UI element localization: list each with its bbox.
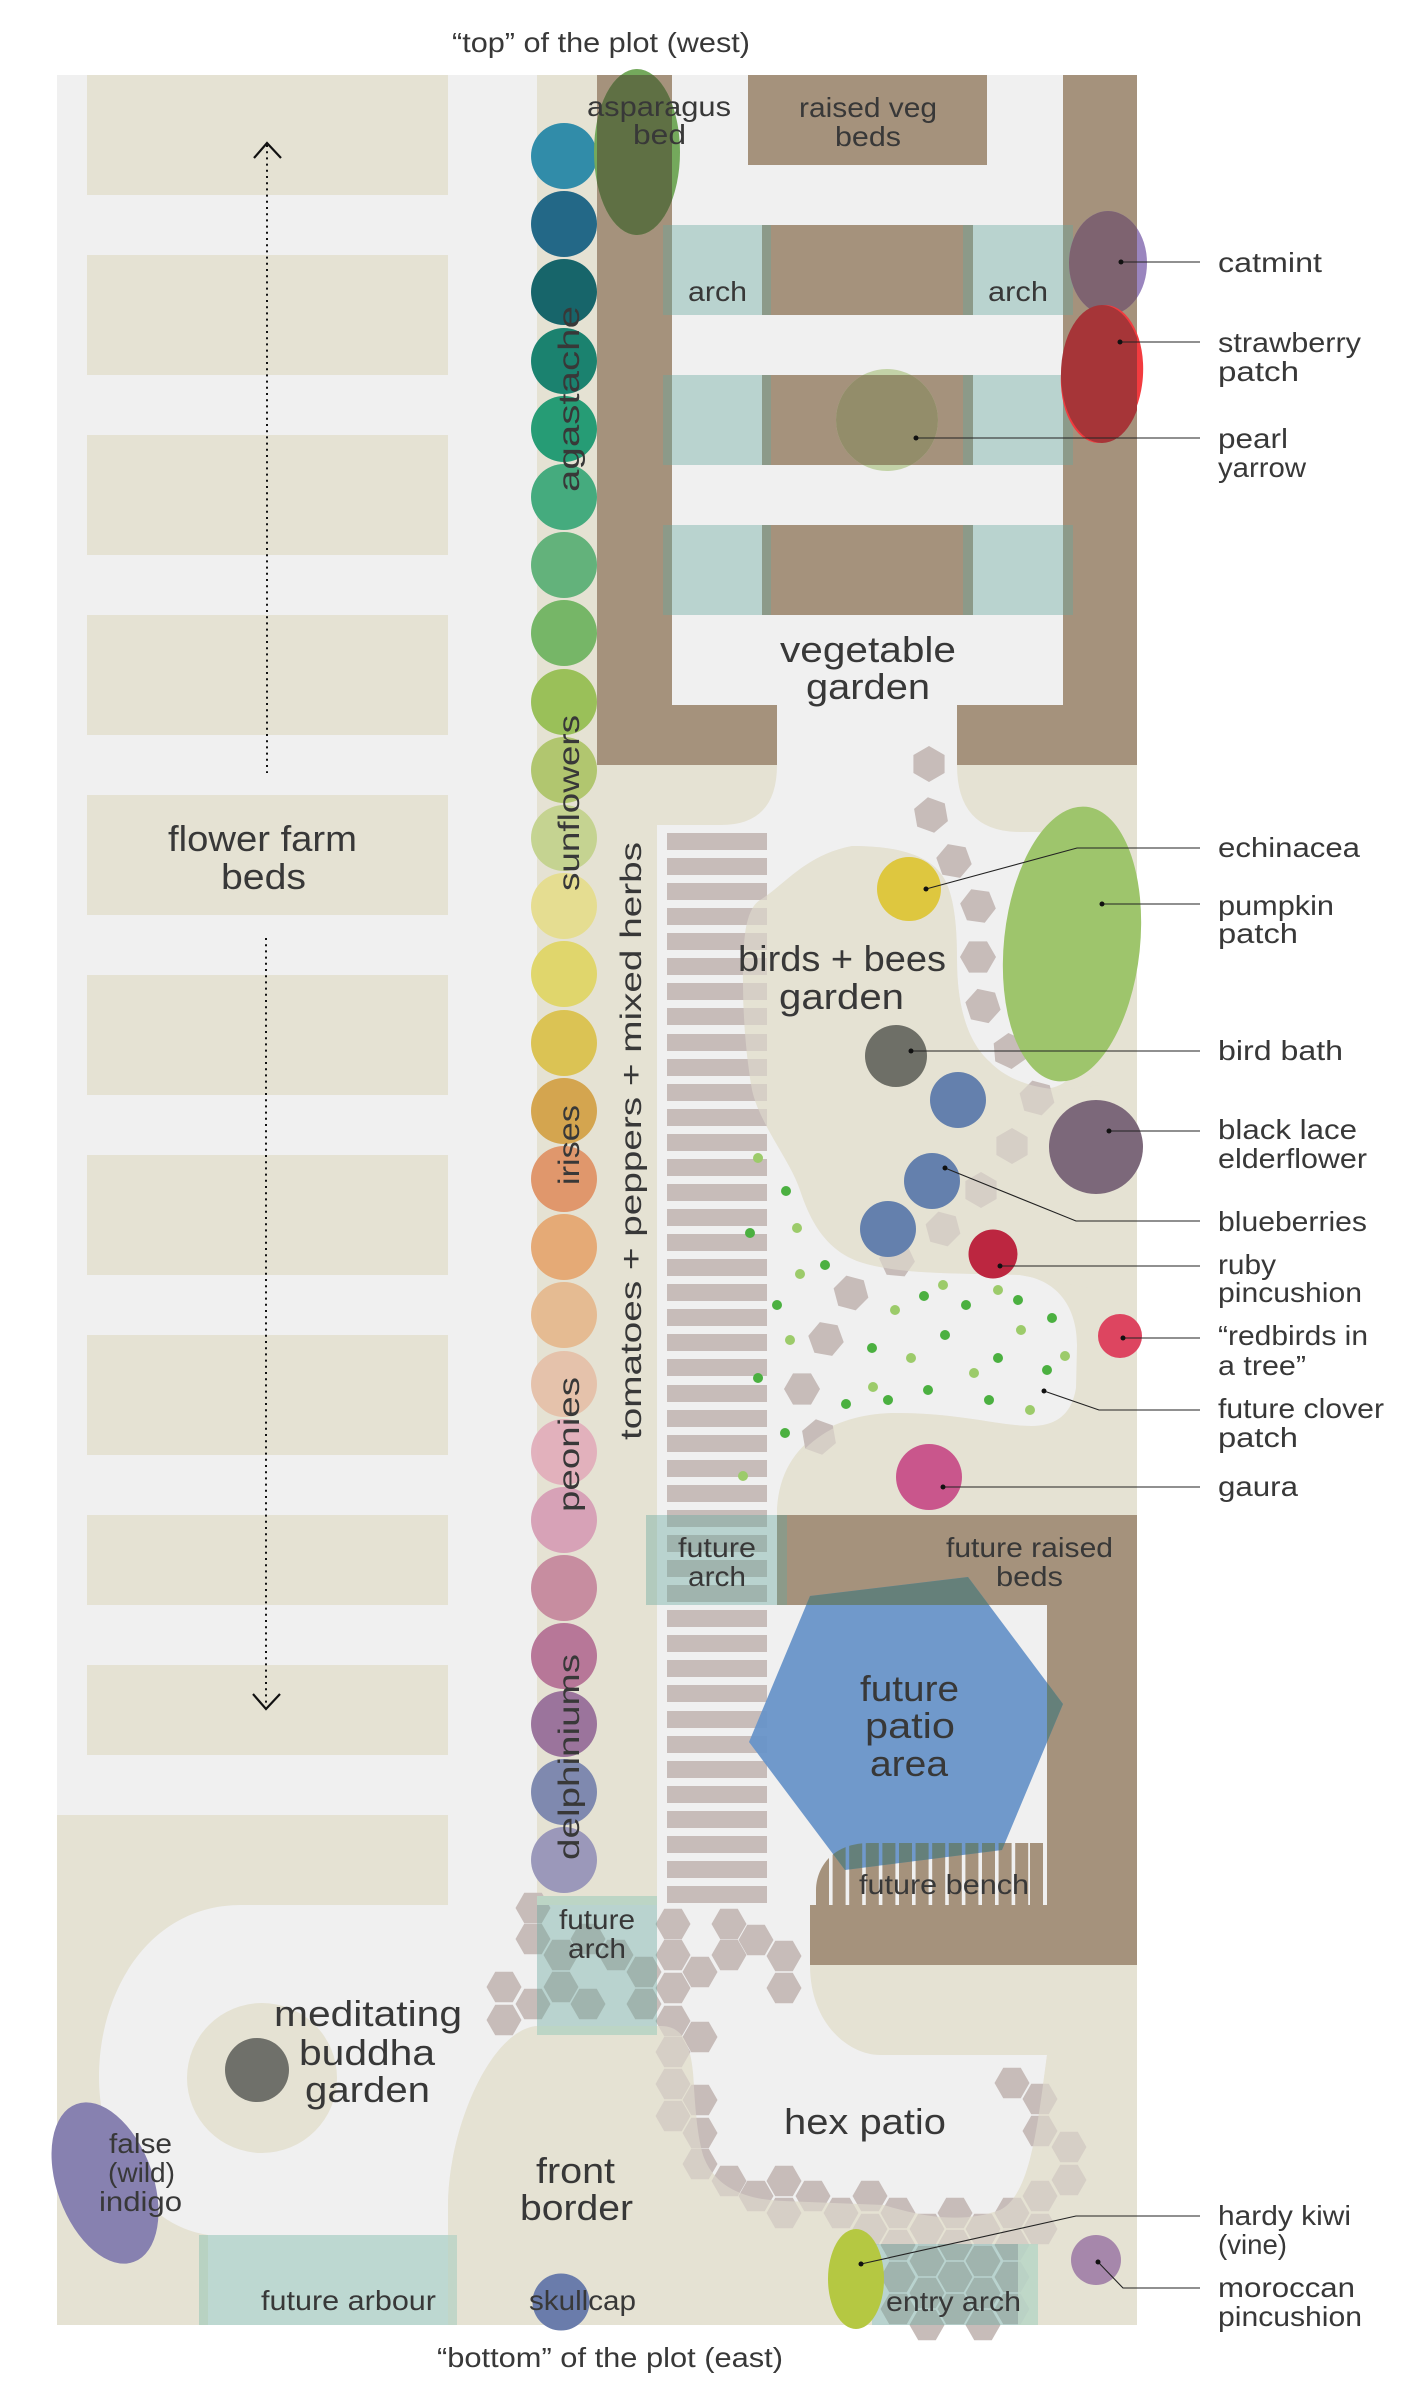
- hardy kiwi label: hardy kiwi: [1218, 2200, 1351, 2231]
- future raised beds label: beds: [996, 1561, 1063, 1592]
- ruby pincushion label: ruby: [1218, 1249, 1276, 1280]
- arch labels: arch: [988, 276, 1048, 307]
- future patio area label: area: [870, 1743, 949, 1784]
- false indigo label: [99, 2128, 182, 2217]
- false indigo ellipse: [31, 2088, 179, 2278]
- flower farm label: flower farm: [168, 818, 357, 859]
- moroccan pincushion circle: [1071, 2235, 1121, 2285]
- catmint ellipse: [1069, 211, 1147, 315]
- vertical planting labels: [553, 306, 586, 1860]
- hardy kiwi label: (vine): [1218, 2229, 1287, 2260]
- moroccan pincushion label: pincushion: [1218, 2301, 1362, 2332]
- future arch label two: [559, 1904, 635, 1964]
- hardy kiwi ellipse: [828, 2229, 884, 2329]
- hardy kiwi label: [1218, 2200, 1351, 2260]
- moroccan pincushion label: moroccan: [1218, 2272, 1355, 2303]
- flower farm label: beds: [221, 856, 306, 897]
- buddha statue: [225, 2038, 289, 2102]
- future arch label: arch: [688, 1561, 746, 1592]
- future arch by front border: [537, 1896, 657, 2035]
- vertical planting labels: peonies: [553, 1377, 586, 1512]
- planting column: [537, 75, 657, 1905]
- skullcap label: skullcap: [529, 2285, 636, 2316]
- entry arch label: entry arch: [886, 2286, 1021, 2317]
- stepping path stripes: [667, 833, 767, 1903]
- pumpkin patch ellipse: [990, 800, 1154, 1088]
- leader dots: [858, 260, 1126, 2266]
- future arbour: [199, 2235, 457, 2325]
- future arch over path: [646, 1515, 787, 1605]
- birds and bees label: birds + bees: [738, 938, 946, 979]
- future arbour label: future arbour: [261, 2285, 436, 2316]
- front border label: [520, 2150, 633, 2228]
- birds and bees label: [738, 938, 946, 1017]
- buddha planting circle: [187, 2003, 337, 2153]
- black lace elderflower label: black lace: [1218, 1114, 1357, 1145]
- vertical planting labels: delphiniums: [553, 1654, 586, 1860]
- pearl yarrow label: yarrow: [1218, 452, 1307, 483]
- raised veg beds label: raised veg: [799, 92, 937, 123]
- echinacea circle: [877, 857, 941, 921]
- blueberries label: blueberries: [1218, 1206, 1367, 1237]
- top caption: “top” of the plot (west): [452, 27, 750, 58]
- birds and bees label: garden: [779, 976, 904, 1017]
- redbirds in a tree label: “redbirds in: [1218, 1320, 1368, 1351]
- beige ground right of path: [657, 765, 1137, 1515]
- flower farm label: [168, 818, 357, 897]
- gaura label: gaura: [1218, 1471, 1298, 1502]
- meditating buddha garden label: buddha: [299, 2032, 436, 2073]
- asparagus label: [587, 91, 731, 150]
- buddha garden beige surround: [57, 1815, 448, 2325]
- future clover patch label: [1218, 1393, 1384, 1453]
- tomatoes peppers herbs label: tomatoes + peppers + mixed herbs: [615, 842, 648, 1440]
- ruby pincushion label: [1218, 1249, 1362, 1308]
- pumpkin patch label: patch: [1218, 918, 1298, 949]
- future arch label two: future: [559, 1904, 635, 1935]
- black lace elderflower label: [1218, 1114, 1367, 1174]
- strawberry patch label: [1218, 327, 1361, 387]
- echinacea label: echinacea: [1218, 832, 1360, 863]
- moroccan pincushion label: [1218, 2272, 1362, 2332]
- front border and patio surround: [448, 1965, 1137, 2325]
- patio overlap with beds: [806, 1577, 1063, 1870]
- bird bath circle: [865, 1025, 927, 1087]
- future bench label: future bench: [859, 1869, 1029, 1900]
- black lace elderflower circle: [1049, 1100, 1143, 1194]
- future arch label: future: [678, 1532, 756, 1563]
- false indigo label: false: [109, 2128, 172, 2159]
- redbirds in a tree label: a tree”: [1218, 1350, 1306, 1381]
- future clover patch label: future clover: [1218, 1393, 1384, 1424]
- pearl yarrow label: [1218, 423, 1307, 483]
- leader lines: [861, 262, 1200, 2288]
- beige overlay softening stones: [743, 846, 1137, 1515]
- future clover patch label: patch: [1218, 1422, 1298, 1453]
- pumpkin patch label: pumpkin: [1218, 890, 1334, 921]
- future raised beds label: future raised: [946, 1532, 1113, 1563]
- future raised beds: [777, 1515, 1137, 1965]
- gaura circle: [896, 1444, 962, 1510]
- false indigo label: indigo: [99, 2186, 182, 2217]
- ruby pincushion label: pincushion: [1218, 1277, 1362, 1308]
- future patio polygon: [749, 1577, 1063, 1870]
- pearl yarrow label: pearl: [1218, 423, 1288, 454]
- front border label: front: [536, 2150, 615, 2191]
- ruby pincushion circle: [968, 1230, 1018, 1278]
- strawberry patch label: strawberry: [1218, 327, 1361, 358]
- false indigo label: (wild): [108, 2157, 175, 2188]
- vegetable garden label: [780, 629, 956, 707]
- future arch label: [678, 1532, 756, 1592]
- vertical planting labels: sunflowers: [553, 715, 586, 891]
- black lace elderflower label: elderflower: [1218, 1143, 1367, 1174]
- grey path through beds: [657, 765, 1077, 1605]
- strawberry patch ellipse: [1060, 305, 1144, 443]
- front border label: border: [520, 2187, 633, 2228]
- arch labels: arch: [688, 276, 747, 307]
- future patio area label: future: [860, 1668, 959, 1709]
- planting column circles: [531, 123, 597, 1893]
- future arch label two: arch: [568, 1933, 626, 1964]
- vegetable garden brown beds: [597, 75, 1137, 765]
- clover dots: [738, 1153, 1070, 1481]
- asparagus label: bed: [633, 119, 686, 150]
- asparagus label: asparagus: [587, 91, 731, 122]
- vertical planting labels: agastache: [553, 306, 586, 492]
- meditating buddha garden label: meditating: [274, 1993, 462, 2034]
- pearl yarrow circle: [836, 369, 938, 471]
- future raised beds label: [946, 1532, 1113, 1592]
- stepping stones: [784, 741, 1058, 1458]
- grey under entry arch: [872, 2244, 1018, 2325]
- plot background: [57, 75, 1137, 2325]
- vegetable garden label: garden: [806, 666, 930, 707]
- bird bath label: bird bath: [1218, 1035, 1343, 1066]
- redbirds in a tree label: [1218, 1320, 1368, 1381]
- vertical planting labels: irises: [553, 1105, 586, 1185]
- vegetable garden arches: [663, 225, 1073, 615]
- raised veg beds label: [799, 92, 937, 152]
- meditating buddha garden label: [274, 1993, 462, 2110]
- asparagus bed ellipse: [594, 69, 680, 235]
- bottom caption: “bottom” of the plot (east): [437, 2342, 783, 2373]
- hex patio label: hex patio: [784, 2101, 946, 2142]
- redbirds in a tree circle: [1098, 1314, 1142, 1358]
- future bench: [816, 1843, 1043, 1905]
- meditating buddha garden label: garden: [305, 2069, 430, 2110]
- birds and bees garden blob: [743, 846, 1100, 1290]
- pumpkin patch label: [1218, 890, 1334, 949]
- catmint label: catmint: [1218, 247, 1322, 278]
- hexagon paving: [486, 1893, 1086, 2340]
- raised veg beds label: beds: [835, 121, 901, 152]
- entry arch: [872, 2244, 1038, 2325]
- beige overlay on hexes: [448, 2026, 1137, 2325]
- future patio area label: patio: [865, 1705, 955, 1746]
- vegetable garden label: vegetable: [780, 629, 956, 670]
- arrow down: [253, 938, 280, 1709]
- strawberry patch label: patch: [1218, 356, 1299, 387]
- arrow up: [254, 143, 281, 773]
- flower farm beds: [87, 75, 448, 1755]
- skullcap circle: [532, 2274, 590, 2330]
- future patio area label: [860, 1668, 959, 1784]
- arch labels: [688, 276, 1048, 307]
- blueberries circles: [860, 1072, 986, 1257]
